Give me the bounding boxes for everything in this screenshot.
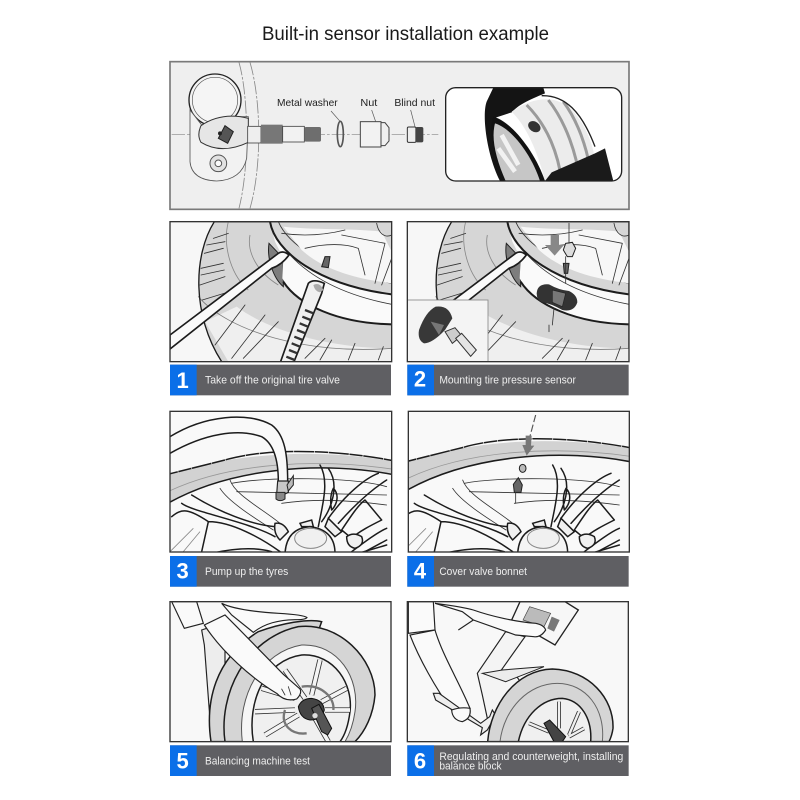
- panel: sensor parts diagram: [170, 62, 629, 209]
- panel: step 6: [407, 602, 629, 776]
- illustration: regulating counterweight: [407, 602, 628, 742]
- step 3 caption: [170, 556, 391, 587]
- step 1 caption: [170, 365, 391, 395]
- step 4 caption: [407, 556, 629, 587]
- step 5 caption: Balancing machine test: [205, 756, 310, 768]
- step 5 caption: [170, 745, 391, 776]
- nut label: Nut: [360, 98, 377, 109]
- step 1 caption: Take off the original tire valve: [205, 374, 340, 386]
- icon: sensor body: [172, 62, 438, 208]
- step 6 caption: Regulating and counterweight, installing: [439, 751, 623, 763]
- illustration: covering valve bonnet: [409, 414, 629, 552]
- illustration: mounting sensor: [407, 222, 629, 362]
- panel: step 3: [169, 410, 392, 587]
- step 6 caption: [407, 745, 629, 776]
- illustration: removing tire valve: [170, 222, 392, 363]
- icon: nut: [360, 110, 389, 147]
- panel: step 2: [407, 222, 629, 395]
- icon: valve stem: [248, 125, 321, 144]
- step 3 caption: 3: [177, 558, 189, 583]
- panel: step 5: [170, 602, 391, 776]
- step 4 caption: 4: [414, 558, 427, 583]
- step 5 caption: 5: [177, 748, 189, 773]
- icon: metal washer: [331, 111, 343, 147]
- step 6 caption: balance block: [439, 761, 502, 773]
- step 2 caption: 2: [414, 367, 426, 392]
- step 6 caption: 6: [414, 748, 426, 773]
- step 3 caption: Pump up the tyres: [205, 566, 289, 578]
- step 2 caption: Mounting tire pressure sensor: [439, 374, 576, 386]
- step 4 caption: Cover valve bonnet: [439, 566, 527, 578]
- step 1 caption: 1: [177, 368, 189, 393]
- title: Built-in sensor installation example: [262, 24, 549, 45]
- photo: tire with sensor: [446, 88, 622, 181]
- panel: step 1: [170, 222, 392, 395]
- blind nut label: Blind nut: [394, 98, 435, 109]
- panel: step 4: [407, 410, 630, 587]
- icon: blind nut: [407, 110, 423, 142]
- illustration: balancing machine test: [170, 602, 391, 742]
- illustration: pumping up tyre: [170, 416, 391, 552]
- metal washer label: Metal washer: [277, 98, 338, 109]
- step 2 caption: [407, 365, 629, 395]
